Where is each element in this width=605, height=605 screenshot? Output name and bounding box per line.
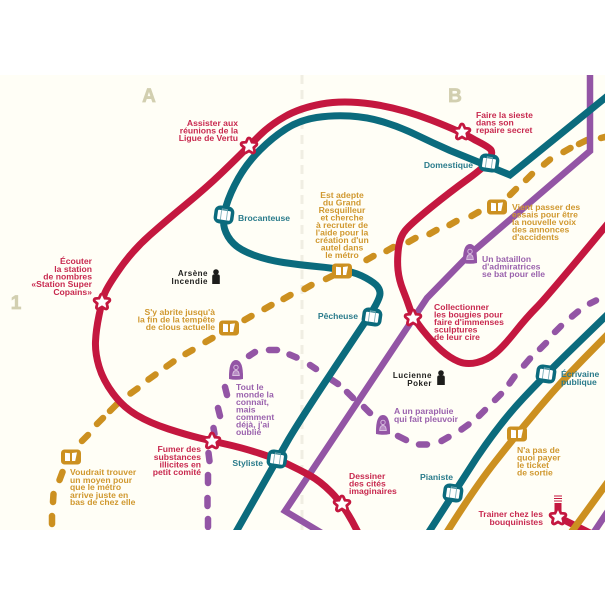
column letter A: A [142,86,156,107]
label: Assister aux réunions: Assister aux [187,118,238,128]
label: Écouter la station: Écouter [60,256,93,266]
teal line [224,94,605,539]
doll: Tout le monde [229,360,243,380]
label: Voudrait trouver: bas de chez elle [70,497,136,507]
label: Dessiner des cités: des cités [349,478,386,488]
doll stations [229,244,477,435]
label: Fumer des substances: petit comité [153,467,201,477]
label: Est adepte du Grand Resquilleur: création d'un [315,235,369,245]
star: Ligue de Vertu [243,140,255,151]
label: Un bataillon: se bat pour elle [482,269,545,279]
label: Voudrait trouver: que le métro [70,482,121,492]
label: Fumer des substances: Fumer des [158,444,201,454]
label: Pêcheuse: Pêcheuse [318,311,358,321]
label: Écouter la station: Copains» [53,287,92,297]
label: Est adepte du Grand Resquilleur: Est adepte [320,190,364,200]
station: Brocanteuse [213,205,235,225]
station book: Voudrait trouver [61,450,81,464]
label: Vient passer: d'accidents [512,232,559,242]
label: Vient passer: la nouvelle voix [512,217,576,227]
teal line right [425,312,605,538]
label: Écrivaine publique: publique [561,377,597,387]
label: Voudrait trouver: un moyen pour [70,475,133,485]
label: Vient passer: des annonces [512,224,570,234]
label: Un bataillon: d'admiratrices [482,262,541,272]
label: Collectionner: Collectionner [434,302,490,312]
label: Tout le monde: connaît, [236,397,269,407]
label: Est adepte du Grand Resquilleur: du Grand [323,198,361,208]
label: Assister aux réunions: réunions de la [180,126,238,136]
doll: admiratrices [463,244,477,264]
station book: tempête de clous [219,320,239,336]
background panel [0,75,605,530]
label: N'a pas de quoi: N'a pas de [517,445,560,455]
label: Fumer des substances: illicites en [159,460,201,470]
label: Assister aux réunions: Ligue de Vertu [179,133,238,143]
label: Collectionner: sculptures [434,324,478,334]
label: Lucienne Poker: Poker [407,379,432,388]
bottom right purple line [592,510,605,530]
label: Écouter la station: «Station Super [31,279,93,289]
label: Écrivaine publique: Écrivaine [561,369,599,379]
person icon: Lucienne Poker [437,370,445,385]
label: Brocanteuse: Brocanteuse [238,213,290,223]
row number 1: 1 [11,293,22,314]
label: Est adepte du Grand Resquilleur: l'aide pour la [316,228,369,238]
station: Pêcheuse [361,307,383,327]
label: Dessiner des cités: imaginaires [349,486,397,496]
label: Fumer des substances: substances [154,452,201,462]
label: Tout le monde: comment [236,412,274,422]
red line [95,102,605,540]
label: Styliste: Styliste [232,458,263,468]
purple dashed line [208,300,596,527]
label: Trainer chez les bouquinistes: bouquinistes [490,517,543,527]
station book: ticket de sortie [507,426,527,442]
label: Est adepte du Grand Resquilleur: à recruter de [316,220,368,230]
label: Est adepte du Grand Resquilleur: autel dans [321,242,363,252]
label: Tout le monde: monde la [236,390,274,400]
doll: parapluie [376,415,390,435]
orange line [442,332,605,540]
label: N'a pas de quoi: de sortie [517,468,553,478]
label: Faire la sieste: dans son [476,118,514,128]
label: Tout le monde: déjà, j'ai [236,420,270,430]
label: Vient passer: Vient passer des [512,202,580,212]
label: Arsène Incendie: Arsène [178,269,208,278]
label: Tout le monde: oublié [236,427,262,437]
label: Vient passer: essais pour être [512,210,578,220]
label: S'y abrite: S'y abrite jusqu'à [145,307,215,317]
station book: voix des annonces [487,200,507,214]
metro network [52,70,605,540]
label: Collectionner: les bougies pour [434,310,503,320]
star: substances [206,435,218,446]
label: Écouter la station: la station [54,264,92,274]
label: Collectionner: faire d'immenses [434,317,504,327]
star: bougies [407,312,419,323]
stars [96,126,564,522]
orange dashed line [52,136,605,524]
label: Tout le monde: mais [236,404,256,414]
label: A un parapluie: qui fait pleuvoir [394,414,459,424]
label: Lucienne Poker: Lucienne [393,371,432,380]
label: Tout le monde: Tout le [236,382,264,392]
label: Dessiner des cités: Dessiner [349,471,386,481]
station: Styliste [266,449,288,469]
label: Écouter la station: de nombres [43,272,92,282]
label: Faire la sieste: Faire la sieste [476,110,533,120]
label: A un parapluie: A un parapluie [394,406,454,416]
column divider [300,75,304,530]
book stations [61,200,527,464]
label: Collectionner: de leur cire [434,332,480,342]
suitcase stations [213,153,557,503]
red terminus hatch [554,496,562,501]
label: Domestique: Domestique [424,160,473,170]
label: Voudrait trouver: arrive juste en [70,490,128,500]
label: S'y abrite: de clous actuelle [146,322,215,332]
person icon: Arsène Incendie [212,269,220,284]
star: cités imaginaires [336,498,348,509]
column letter B: B [448,86,462,107]
station book: Grand Resquilleur [332,264,352,278]
label: Faire la sieste: repaire secret [476,125,533,135]
label: Trainer chez les bouquinistes: Trainer chez les [478,509,543,519]
star: Station Super Copains [96,296,108,307]
label: N'a pas de quoi: le ticket [517,460,549,470]
bottom right red line [558,503,592,534]
star: bouquinistes [552,511,564,522]
label: N'a pas de quoi: quoi payer [517,452,561,462]
label: Voudrait trouver: Voudrait trouver [70,467,137,477]
label: Est adepte du Grand Resquilleur: Resquilleur [319,205,366,215]
station: Écrivaine publique [535,364,557,384]
label: Est adepte du Grand Resquilleur: le métro [325,250,359,260]
purple line [285,70,590,535]
label: Pianiste: Pianiste [420,472,453,482]
bottom right orange line [570,479,605,534]
station: Domestique [478,153,500,173]
station: Pianiste [442,483,464,503]
label: S'y abrite: la fin de la tempête [138,314,215,324]
label: Un bataillon: Un bataillon [482,254,531,264]
label: Arsène Incendie: Incendie [172,277,208,286]
label: Est adepte du Grand Resquilleur: et cherche [320,212,364,222]
star: sieste [456,126,468,137]
